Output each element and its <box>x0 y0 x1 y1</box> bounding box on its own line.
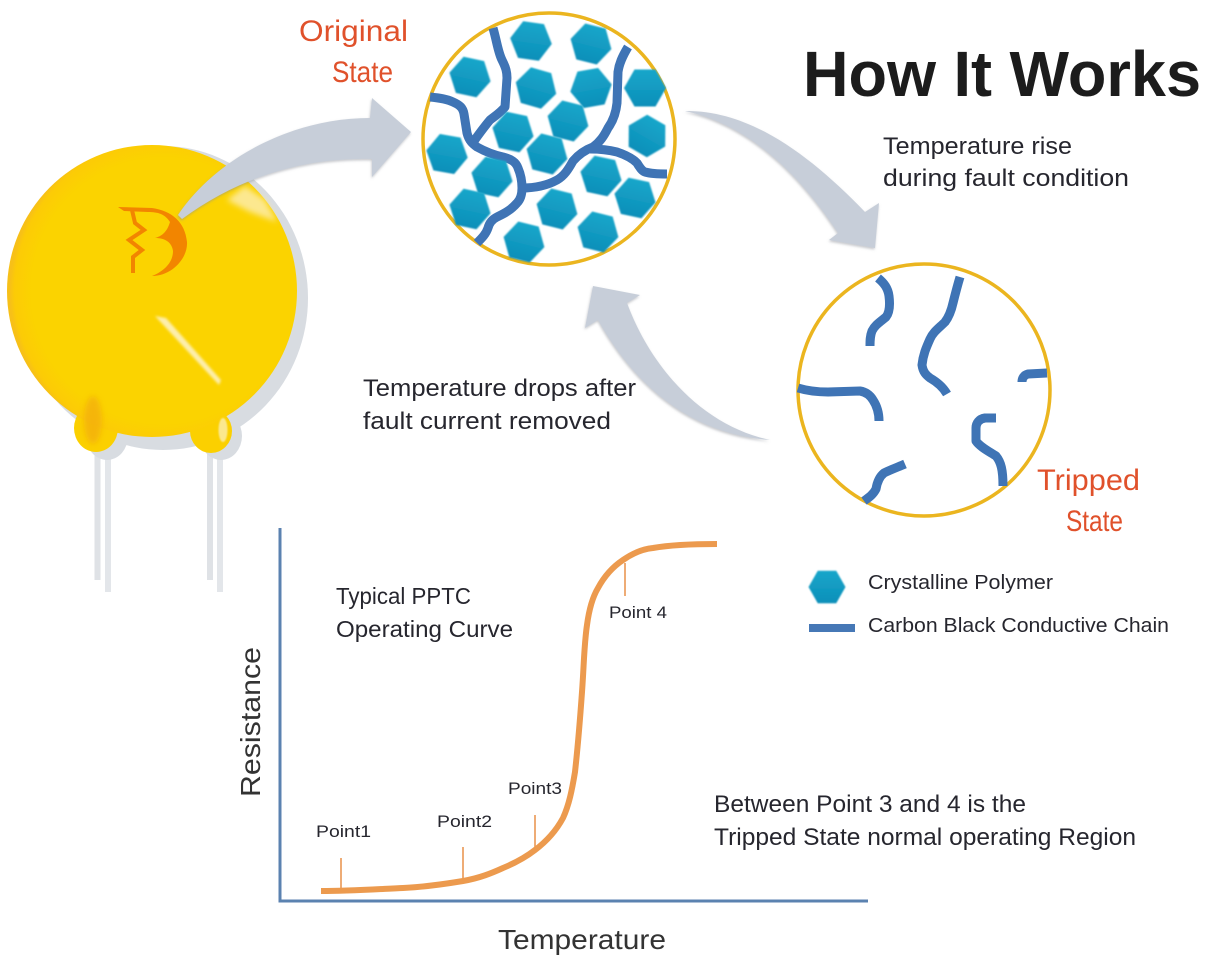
heading: tripped state: State <box>1066 505 1123 538</box>
arrow: tripped to original <box>585 286 770 440</box>
text: tripped region note <box>714 791 1136 851</box>
device: PPTC component <box>7 145 308 592</box>
legend label: crystalline polymer: Crystalline Polymer <box>868 571 1053 594</box>
panel: tripped state circle <box>798 264 1050 516</box>
broken carbon chains <box>798 277 1047 501</box>
legend label: conductive chain: Carbon Black Conductive Chain <box>868 614 1169 637</box>
panel: original state circle <box>423 13 675 265</box>
chart title: Typical PPTC <box>336 583 471 609</box>
legend <box>809 571 1169 637</box>
circle outline <box>423 13 675 265</box>
text: tripped region note: Tripped State normal operating Region <box>714 824 1136 851</box>
chart title: Operating Curve <box>336 616 513 642</box>
crystalline polymer hexagons <box>423 20 674 265</box>
heading: original state: State <box>332 56 393 89</box>
chart: PPTC operating curve <box>235 528 868 955</box>
x axis label: Temperature <box>498 924 666 955</box>
y axis label: Resistance <box>235 647 266 797</box>
label: point 3: Point3 <box>508 779 562 798</box>
title: How It Works <box>803 38 1201 110</box>
text: temperature drops: fault current removed <box>363 408 611 435</box>
device body <box>7 145 297 453</box>
arrow: original to tripped <box>685 111 879 248</box>
label: point 1: Point1 <box>316 822 371 841</box>
icon: conductive chain <box>809 624 855 632</box>
text: temperature rise <box>883 133 1129 192</box>
label: point 4: Point 4 <box>609 603 667 622</box>
resistance curve <box>321 544 717 891</box>
arrow: device to original state <box>178 98 411 219</box>
text: tripped region note: Between Point 3 and 4 is the <box>714 791 1026 818</box>
carbon black chains <box>430 28 667 243</box>
heading: tripped state <box>1037 464 1140 538</box>
chart title <box>336 583 513 642</box>
heading: original state: Original <box>299 15 408 48</box>
device shadow <box>18 146 308 460</box>
device leads <box>94 450 223 592</box>
point tick marks <box>341 563 625 892</box>
heading: original state <box>299 15 408 89</box>
label: point 2: Point2 <box>437 812 492 831</box>
circle outline <box>798 264 1050 516</box>
text: temperature drops <box>363 375 636 435</box>
text: temperature rise: Temperature rise <box>883 133 1072 160</box>
text: temperature rise: during fault condition <box>883 165 1129 192</box>
heading: tripped state: Tripped <box>1037 464 1140 497</box>
icon: orange logo <box>118 207 187 276</box>
icon: crystalline polymer <box>809 571 845 603</box>
axes <box>280 528 868 901</box>
text: temperature drops: Temperature drops after <box>363 375 636 402</box>
